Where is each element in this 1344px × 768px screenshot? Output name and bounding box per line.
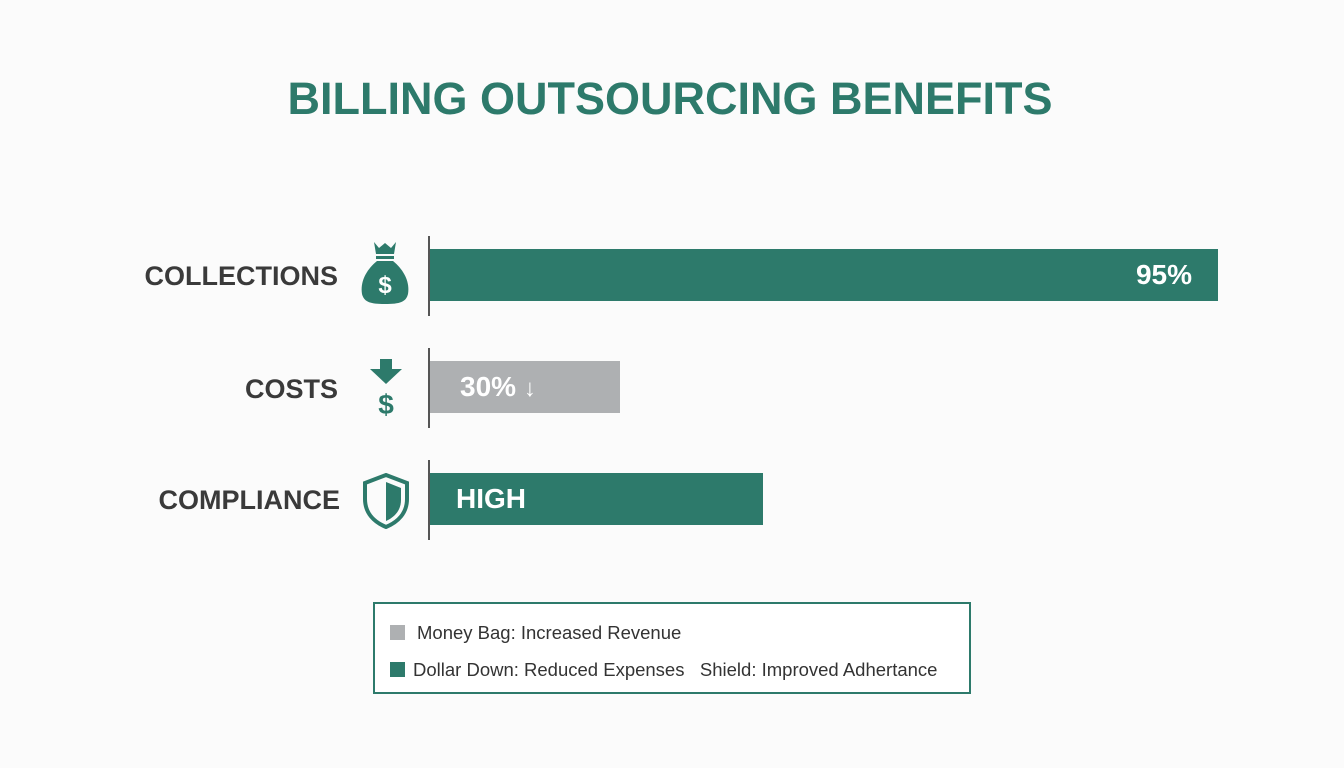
label: collections: COLLECTIONS (144, 261, 338, 291)
icon: dollar down (370, 359, 402, 419)
bar: collections 95%: 95% (1136, 259, 1192, 290)
bar: costs 30% (430, 361, 620, 413)
bar: compliance high (430, 473, 763, 525)
icon: money bag: $ (378, 272, 392, 299)
icon: shield (363, 473, 409, 529)
label: compliance: COMPLIANCE (158, 485, 340, 515)
legend item: money bag: Money Bag: Increased Revenue (417, 622, 681, 643)
legend (373, 602, 971, 694)
bar: collections 95% (430, 249, 1218, 301)
bar: compliance high: HIGH (456, 483, 526, 514)
bar: costs 30%: 30% ↓ (460, 371, 536, 402)
icon: money bag (362, 242, 408, 304)
label: costs: COSTS (245, 374, 338, 404)
legend item: dollar down and shield: Dollar Down: Reduced Expenses Shield: Improved Adhertance (413, 659, 937, 680)
title: BILLING OUTSOURCING BENEFITS (288, 73, 1052, 124)
